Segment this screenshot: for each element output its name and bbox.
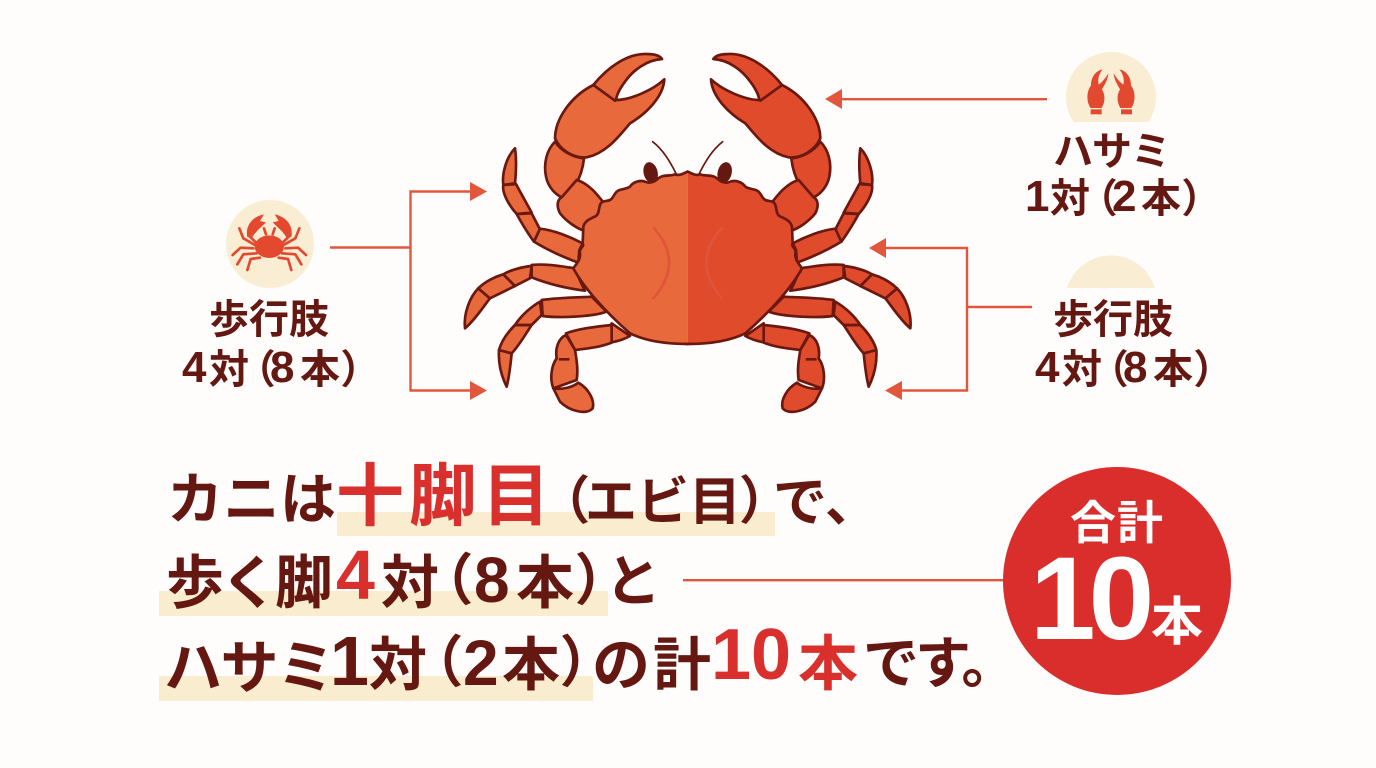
text line 3: 対 — [369, 618, 427, 702]
label: right walking legs: （ — [1107, 337, 1127, 395]
highlight bar line 2 — [159, 591, 608, 616]
label: right walking legs: 本 — [1153, 337, 1193, 395]
label: right walking legs: 対 — [1062, 337, 1102, 395]
text line 3: ハサミ — [164, 621, 334, 705]
label: left walking legs: 本 — [300, 337, 340, 395]
label: claws: 2 — [1112, 172, 1136, 221]
shell markings — [653, 228, 722, 298]
text line 3 — [164, 615, 1013, 705]
text line 3: ） — [562, 618, 590, 699]
shell left half — [573, 172, 688, 344]
text line 2: （ — [443, 536, 471, 617]
label: left walking legs: （ — [254, 337, 274, 395]
badge unit: 本 — [1151, 580, 1203, 655]
text line 3: 10 — [711, 615, 791, 695]
label: claws: （ — [1096, 166, 1116, 224]
arrow: claw — [825, 89, 1047, 109]
label: right walking legs: 4 — [1035, 343, 1059, 392]
text line 3: 2 — [463, 627, 499, 699]
text line 2: 4 — [336, 536, 375, 614]
label: left walking legs: 歩行肢 — [209, 287, 329, 345]
text line 2: 本 — [516, 536, 574, 620]
highlight bar line 1 — [337, 512, 775, 536]
text line 2: ） — [577, 536, 605, 617]
label: claws: 本 — [1141, 166, 1181, 224]
icon: claws — [1066, 52, 1156, 122]
label: right walking legs — [1035, 287, 1215, 395]
label: left walking legs: 8 — [270, 343, 294, 392]
label: right walking legs: 歩行肢 — [1053, 287, 1173, 345]
label: claws: 対 — [1050, 166, 1090, 224]
text line 1: エビ目 — [585, 460, 741, 535]
text line 2: と — [605, 537, 661, 618]
text line 1: （ — [562, 459, 588, 534]
text line 3: 1 — [330, 622, 369, 700]
text line 3: 本 — [798, 616, 858, 703]
connector to total badge — [683, 579, 1005, 581]
icon: small crab — [226, 200, 314, 288]
right half limbs — [711, 54, 911, 412]
text line 1: 十脚目 — [336, 441, 555, 540]
label: claws: ） — [1183, 166, 1203, 224]
label: left walking legs: ） — [342, 337, 362, 395]
text line 2: 8 — [474, 544, 510, 616]
text line 1 — [167, 441, 879, 540]
text line 3: （ — [433, 618, 461, 699]
text line 1: で、 — [773, 458, 879, 537]
shell right half — [688, 172, 802, 344]
eyes — [641, 161, 734, 185]
crab — [465, 54, 911, 412]
badge: total 10 — [1003, 467, 1231, 695]
label: right walking legs: ） — [1195, 337, 1215, 395]
icon: right legs dome — [1067, 255, 1155, 288]
badge number: 10 — [1030, 533, 1147, 665]
highlight bar line 3 — [159, 676, 593, 701]
text line 1: カニは — [167, 455, 336, 536]
label: left walking legs — [182, 287, 362, 395]
label: right walking legs: 8 — [1123, 343, 1147, 392]
label: left walking legs: 4 — [182, 343, 206, 392]
label: claws: 1 — [1025, 172, 1049, 221]
text line 3: です。 — [863, 619, 1013, 700]
left half limbs — [465, 54, 664, 412]
text line 2: 対 — [381, 536, 439, 620]
antennae — [653, 142, 723, 173]
text line 2 — [166, 536, 661, 620]
label: claws — [1025, 119, 1203, 224]
text line 2: 歩く脚 — [166, 536, 330, 620]
text line 3: 本 — [502, 618, 560, 702]
text line 1: ） — [741, 459, 767, 534]
text line 3: の計 — [592, 618, 714, 702]
label: left walking legs: 対 — [209, 337, 249, 395]
badge heading: 合計 — [1070, 486, 1164, 552]
arrow: left legs bracket — [330, 182, 487, 400]
label: claws: ハサミ — [1053, 119, 1170, 177]
arrow: right legs bracket — [869, 238, 1032, 400]
